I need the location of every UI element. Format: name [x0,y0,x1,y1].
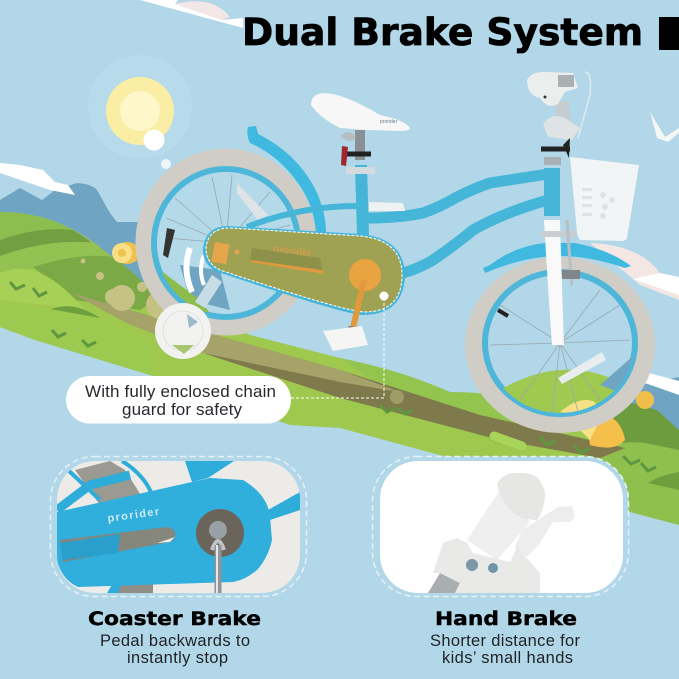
saddle [311,93,410,131]
left cloud [0,163,75,195]
panel: coaster brake photo: prorider [107,506,161,525]
hand brake description: Shorter distance for [430,632,580,650]
callout pill: guard for safety [122,400,242,419]
title end block [659,17,679,50]
hand brake description: kids’ small hands [442,649,573,667]
training wheel bracket [195,275,222,308]
hand brake label [430,609,580,667]
hand brake heading: Hand Brake [435,609,577,630]
brake caliper [540,220,580,285]
grass ticks [10,282,656,471]
front fender [483,243,631,273]
panel: hand brake photo [372,456,628,596]
basket [570,157,639,241]
callout leader line [291,292,388,398]
hay bales [112,242,654,448]
chain guard [203,226,405,315]
green hillside [0,212,679,525]
hill details [80,258,174,319]
callout pill [66,376,291,424]
coaster brake heading: Coaster Brake [88,609,261,630]
right scenery [590,243,679,430]
title: Dual Brake System [242,11,643,54]
handlebar stem [541,100,580,165]
top cloud [140,0,243,28]
handlebar grip [527,72,578,106]
panel: coaster brake photo [50,456,306,596]
callout pill: With fully enclosed chain [85,382,276,401]
saddle: prorider [380,119,398,125]
crank and pedal [323,280,368,351]
coaster brake description [100,632,250,667]
front wheel [474,266,646,424]
brake cable [578,72,590,138]
bike frame [247,165,552,273]
rear wheel [145,158,307,326]
fork [544,220,564,345]
road [72,293,625,458]
training wheel [155,303,211,359]
left mountain [0,183,160,300]
rear footrest [369,202,405,211]
seat post and clamp [341,130,375,174]
rear fender [247,126,326,233]
coaster brake label [88,609,261,667]
chain guard: prorider [273,244,312,259]
coaster brake description: Pedal backwards to [100,632,250,650]
hand brake description [430,632,580,667]
coaster brake description: instantly stop [127,649,228,667]
sun [88,55,192,169]
bird [650,112,679,142]
